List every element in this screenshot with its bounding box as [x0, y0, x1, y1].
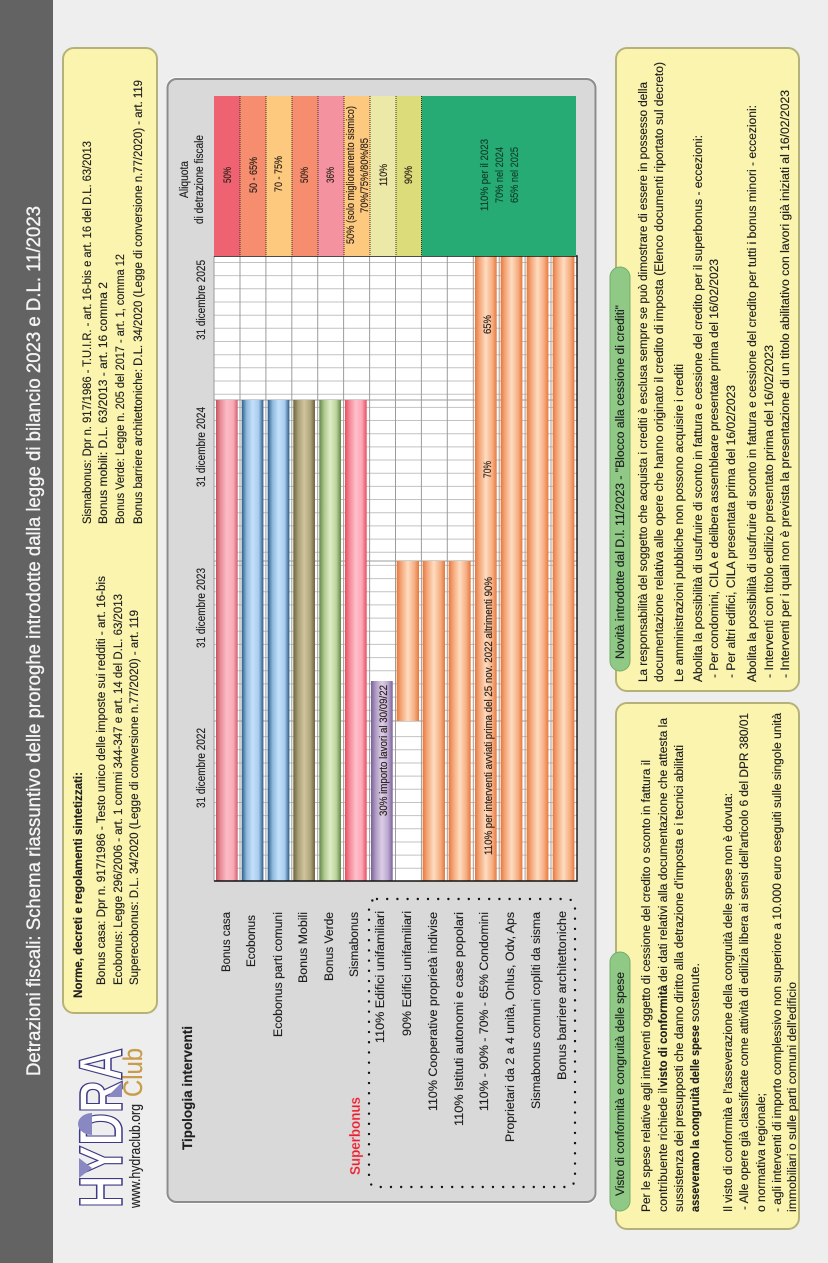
row labels: Ecobonus parti comuni [271, 912, 285, 1037]
bar labels: 65% [482, 315, 494, 334]
column header: aliquota [179, 135, 206, 224]
bar: bonus verde [319, 400, 341, 881]
bar: bonus casa [216, 400, 238, 881]
aliquota column: 110% per il 2023 [479, 139, 491, 211]
aliquota column: 90% [403, 166, 415, 184]
row labels: Bonus barriere architettoniche [555, 911, 569, 1080]
panel: novita D.L. 11/2023: La responsabilità del soggetto che acquista i crediti è esclusa sempre se può dimostrare di essere in possesso della [636, 82, 650, 682]
aliquota column: 70 - 75% [273, 156, 285, 192]
heading: tipologia interventi: Tipologia interventi [179, 1026, 195, 1150]
bar: cooperative [423, 561, 445, 881]
aliquota column: 50% [299, 167, 311, 183]
panel: visto di conformita: o normativa regionale; [754, 1093, 768, 1212]
panel: novita D.L. 11/2023: - Interventi con titolo edilizio presentato prima del 16/02/2023 [762, 345, 776, 678]
logo: Hydra Club: www.hydraclub.org [127, 1104, 144, 1209]
bar labels: 30% importo lavori al 30/09/22 [378, 685, 390, 816]
row labels: Sismabonus comuni copliti da sisma [529, 912, 543, 1109]
badge: blocco cessione crediti [610, 267, 630, 671]
panel: novita D.L. 11/2023: Le amministrazioni pubbliche non possono acquisire i crediti [672, 364, 686, 682]
panel: visto di conformita: Il visto di conformità e l'asseverazione della congruità delle spese non è dovuta: [721, 793, 735, 1212]
row labels: Sismabonus [347, 912, 361, 977]
gantt chart [214, 256, 577, 881]
header band with title: Detrazioni fiscali: Schema riassuntivo delle proroghe introdotte dalla legge di bilancio 2023 e D.L. 11/2023 [23, 206, 45, 1076]
row labels: 90% Edifici unifamiliari [400, 911, 414, 1036]
aliquota column: 36% [325, 167, 337, 183]
column header: aliquota: Aliquota [179, 160, 191, 198]
panel: novita D.L. 11/2023: Abolita la possibilità di usufruire di sconto in fattura e cessione del credito per tutti i bonus minori - eccezioni: [745, 105, 759, 682]
panel: norme e decreti: Sismabonus: Dpr n. 917/1986 - T.U.I.R. - art. 16-bis e art. 16 del D.L. 63/2013 [80, 141, 94, 524]
panel: visto di conformita: sussistenza dei presupposti che danno diritto alla detrazione d'imposta e i tecnici abilitati [672, 745, 686, 1212]
aliquota column [214, 96, 576, 256]
bar labels [378, 315, 495, 855]
aliquota column: 50% [222, 167, 234, 183]
bar: 90% edifici unifamiliari [397, 561, 419, 721]
bar: istituti autonomi [449, 561, 471, 881]
aliquota column: 70% nel 2024 [494, 147, 506, 203]
panel: chart container [166, 77, 597, 1204]
bar: 110% edifici unifamiliari [371, 681, 393, 881]
column headers: dates: 31 dicembre 2022 [196, 728, 208, 808]
panel: norme e decreti: Superecobonus: D.L. 34/2020 (Legge di conversione n.77/2020) - art. 119 [127, 610, 141, 985]
badge: visto di conformita e congruita [610, 952, 630, 1211]
logo: Hydra Club: HYDRA [67, 1048, 135, 1208]
column headers: dates: 31 dicembre 2025 [196, 260, 208, 340]
row labels: Proprietari da 2 a 4 unità, Onlus, Odv, Aps [503, 912, 517, 1142]
panel: norme e decreti: Bonus mobili: D.L. 63/2013 - art. 16 comma 2 [96, 282, 110, 524]
panel: novita D.L. 11/2023: - Per condomini, CILA e delibera assembleare presentate prima del 16/02/2023 [707, 259, 721, 678]
row labels: 110% - 90% - 70% - 65% Condomini [477, 912, 491, 1111]
bar: sismabonus comuni [527, 256, 548, 881]
header band with title [0, 0, 53, 1263]
row labels: Bonus Mobili [296, 912, 310, 983]
panel: norme e decreti: Bonus barriere architettoniche: D.L. 34/2020 (Legge di conversione n.77/2020) - art. 119 [131, 80, 145, 524]
bar: bonus mobili [293, 400, 315, 881]
badge: visto di conformita e congruita: Visto di conformità e congruità delle spese [613, 972, 627, 1196]
panel: norme e decreti: Bonus Verde: Legge n. 205 del 2017 - art. 1, comma 12 [113, 254, 127, 524]
aliquota column: 50 - 65% [248, 157, 260, 193]
row labels: Bonus Verde [322, 912, 336, 981]
column headers: dates: 31 dicembre 2023 [196, 568, 208, 648]
superbonus dotted frame [369, 899, 575, 1187]
badge: blocco cessione crediti: Novità introdotte dal D.l. 11/2023 - "Blocco alla cessione di crediti" [613, 305, 627, 659]
panel: norme e decreti [63, 48, 157, 1013]
panel: novita D.L. 11/2023 [610, 48, 799, 691]
bar: ecobonus parti comuni [268, 400, 289, 881]
bar: condomini [475, 256, 497, 881]
aliquota column: 110% [378, 164, 390, 186]
row labels: 110% Edifici unifamiliari [373, 911, 387, 1043]
panel: visto di conformita: contribuente richiede il [656, 1088, 670, 1212]
bars [216, 256, 574, 881]
logo: Hydra Club: Club [118, 1048, 148, 1097]
row labels: Ecobonus [244, 915, 258, 967]
label: superbonus: Superbonus [347, 1097, 364, 1175]
aliquota column: 50% (solo miglioramento sismico) [345, 106, 357, 244]
panel: norme e decreti: Ecobonus: Legge 296/2006 - art. 1 commi 344-347 e art. 14 del D.L. 63/2013 [111, 594, 125, 985]
panel: novita D.L. 11/2023: - Per altri edifici, CILA presentata prima del 16/02/2023 [724, 385, 738, 678]
panel: novita D.L. 11/2023: documentazione relativa alle opere che hanno originato il credito di imposta (Elenco documenti riportato sul decreto) [652, 62, 666, 682]
bar: ecobonus [242, 400, 263, 881]
row labels: 110% Istituti autonomi e case popolari [452, 912, 466, 1126]
bar: barriere architettoniche [553, 256, 574, 881]
aliquota column: 65% nel 2025 [509, 147, 521, 203]
panel: visto di conformita: immobiliari o sulle parti comuni dell'edificio [785, 982, 799, 1212]
row labels [219, 911, 569, 1142]
panel: visto di conformita: dei dati relativi alla documentazione che attesta la [656, 718, 670, 982]
column header: aliquota: di detrazione fiscale [194, 135, 206, 224]
bar labels: 70% [482, 461, 494, 478]
panel: visto di conformita: sostenute. [688, 963, 702, 1022]
panel: norme e decreti: Norme, decreti e regolamenti sintetizzati: [71, 772, 85, 998]
panel: novita D.L. 11/2023: Abolita la possibilità di usufruire di sconto in fattura e cessione del credito per il superbonus - eccezioni: [691, 135, 705, 682]
panel: visto di conformita: visto di conformità [656, 985, 670, 1087]
panel: visto di conformita [610, 703, 799, 1229]
row labels: Bonus casa [219, 912, 233, 972]
logo: Hydra Club [67, 1048, 148, 1209]
bar: proprietari [501, 256, 522, 881]
column headers: dates: 31 dicembre 2024 [196, 406, 208, 487]
panel: visto di conformita: asseverano la congruità delle spese [688, 1025, 702, 1212]
aliquota column: 70%/75%/80%/85 [359, 138, 371, 213]
row labels: 110% Cooperative proprietà indivise [426, 912, 440, 1111]
column headers: dates [196, 260, 208, 808]
panel: novita D.L. 11/2023: - Interventi per i quali non è prevista la presentazione di un titolo abilitativo con lavori già iniziati al 16/02/2023 [778, 90, 792, 678]
panel: visto di conformita: - Alle opere già classificate come attività di edilizia libera ai sensi dell'articolo 6 del DPR 380/01 [737, 713, 751, 1210]
panel: norme e decreti: Bonus casa: Dpr n. 917/1986 - Testo unico delle imposte sui redditi - art. 16-bis [94, 576, 108, 985]
panel: visto di conformita: - agli interventi di importo complessivo non superiore a 10.000 euro eseguiti sulle singole unità [770, 713, 784, 1212]
panel: visto di conformita: Per le spese relative agli interventi oggetto di cessione del credito o sconto in fattura il [639, 760, 653, 1212]
bar: sismabonus [345, 400, 367, 881]
bar labels: 110% per interventi avviati prima del 25 nov. 2022 altrimenti 90% [483, 577, 495, 855]
